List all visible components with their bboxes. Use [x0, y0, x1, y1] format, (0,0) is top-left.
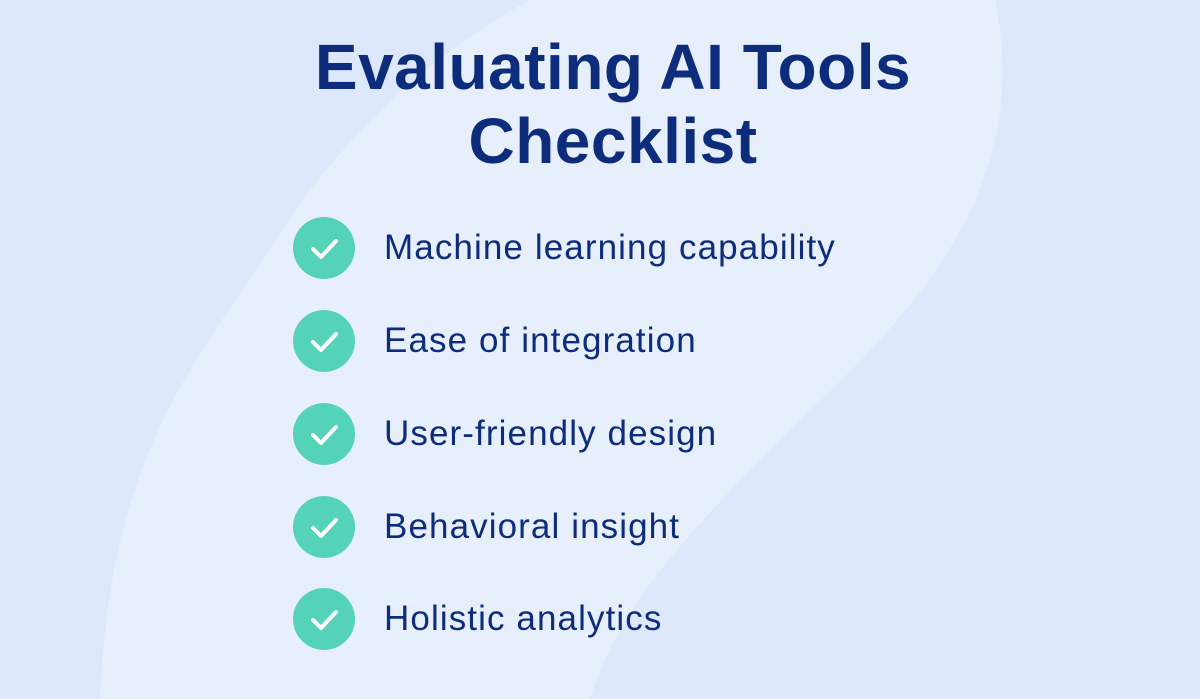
item: integration: Ease of integration	[384, 321, 697, 360]
item: design	[293, 403, 717, 465]
title: Checklist	[468, 105, 758, 177]
item: machine learning: Machine learning capability	[384, 228, 836, 267]
title	[315, 31, 911, 177]
item: analytics: Holistic analytics	[384, 599, 662, 638]
title: Evaluating AI Tools	[315, 31, 911, 103]
item: integration	[293, 310, 697, 372]
item: behavioral	[293, 496, 680, 558]
item: design: User-friendly design	[384, 414, 717, 453]
item: machine learning	[293, 217, 836, 279]
item: behavioral: Behavioral insight	[384, 507, 680, 546]
item: analytics	[293, 588, 662, 650]
